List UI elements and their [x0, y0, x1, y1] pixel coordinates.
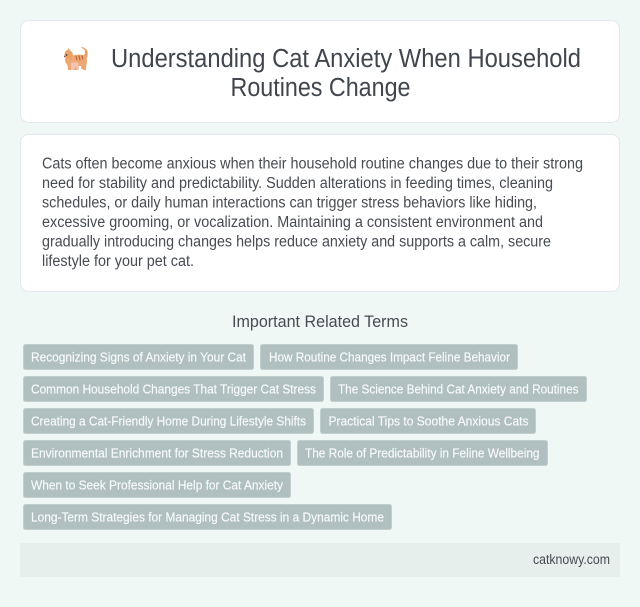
text block: description: schedules, or daily human interactions can trigger stress behaviors like hiding,: [42, 194, 537, 212]
panel: title card: [20, 20, 620, 122]
tag: [24, 408, 314, 434]
tag: Environmental Enrichment for Stress Reduction: [31, 446, 283, 460]
panel: description: [20, 134, 620, 292]
title: Understanding Cat Anxiety When Household: [111, 45, 581, 73]
text block: description: need for stability and predictability. Sudden alterations in feeding times, cleaning: [42, 175, 553, 192]
text block: description: excessive grooming, or vocalization. Maintaining a consistent environment and: [42, 214, 543, 231]
tag: When to Seek Professional Help for Cat Anxiety: [31, 478, 283, 492]
tag: Creating a Cat-Friendly Home During Lifestyle Shifts: [31, 414, 306, 428]
tag: The Role of Predictability in Feline Wellbeing: [305, 446, 540, 460]
tag: Practical Tips to Soothe Anxious Cats: [328, 414, 529, 428]
text block: description: Cats often become anxious when their household routine changes due to their strong: [42, 156, 583, 172]
tag: [24, 504, 392, 530]
title: [111, 45, 581, 102]
footer text: catknowy.com: [533, 552, 610, 567]
tag: Recognizing Signs of Anxiety in Your Cat: [31, 350, 246, 364]
tag: [24, 376, 324, 402]
title: Routines Change: [230, 74, 410, 102]
tag: [298, 440, 548, 466]
tag: [330, 376, 586, 402]
text block: description: lifestyle for your pet cat.: [42, 253, 194, 270]
text block: description: [42, 156, 583, 270]
tag: Common Household Changes That Trigger Cat Stress: [31, 382, 316, 396]
tag: Long-Term Strategies for Managing Cat Stress in a Dynamic Home: [31, 510, 384, 524]
text block: description: gradually introducing changes helps reduce anxiety and supports a calm, secure: [42, 234, 551, 250]
icon: cat: [64, 47, 88, 70]
tag: [24, 344, 254, 370]
tag: [320, 408, 536, 434]
tag list: related terms: [24, 344, 586, 530]
tag: [260, 344, 518, 370]
tag: [24, 472, 290, 498]
heading: related terms: Important Related Terms: [232, 313, 408, 331]
tag: The Science Behind Cat Anxiety and Routines: [338, 382, 579, 396]
tag: How Routine Changes Impact Feline Behavior: [269, 350, 511, 364]
tag: [24, 440, 290, 466]
footer: [20, 543, 620, 577]
